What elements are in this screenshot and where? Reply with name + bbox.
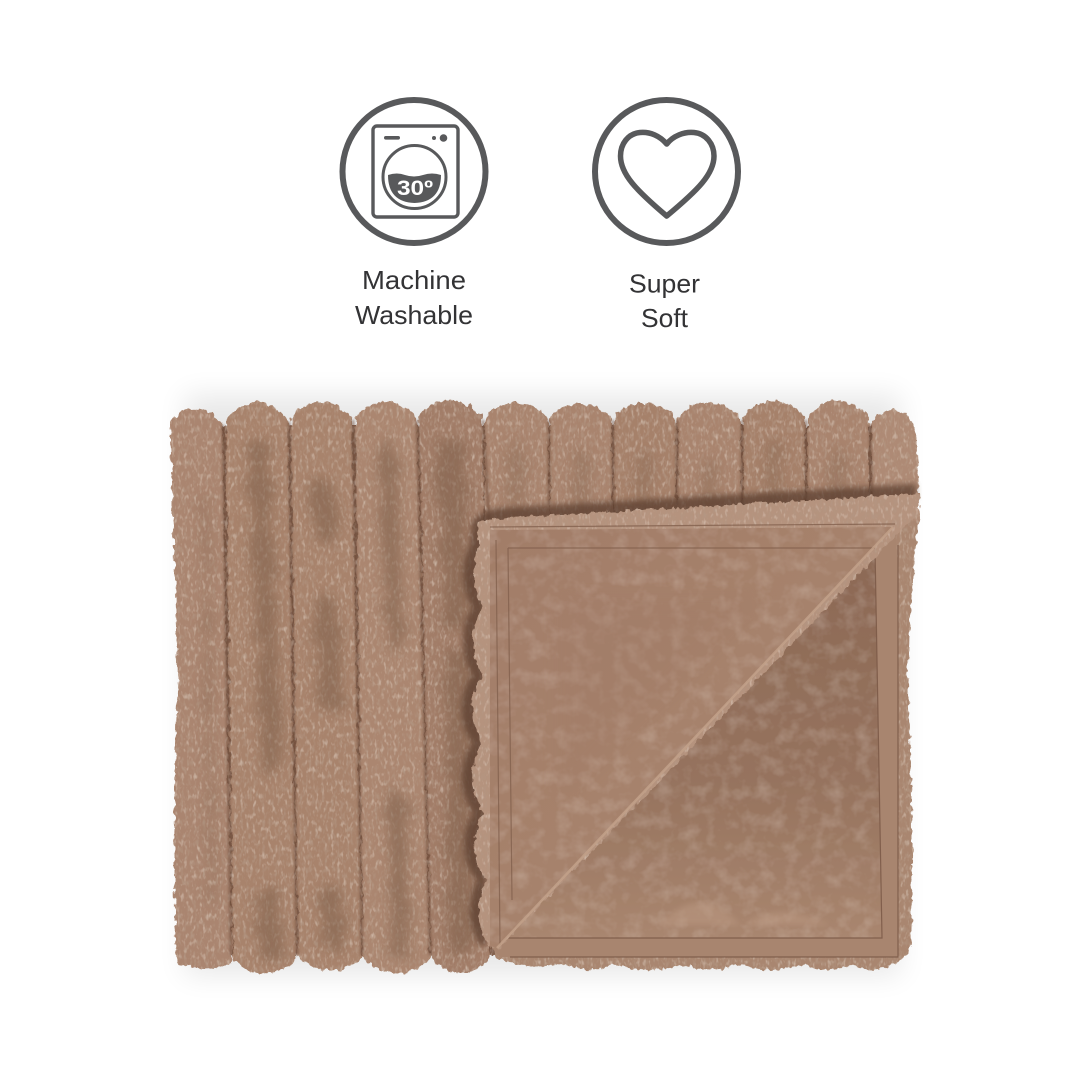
- label: machine washable: Machine: [362, 265, 466, 295]
- icon: washing machine in circle: [342, 100, 486, 243]
- shadow under flap edge: [462, 484, 916, 945]
- backing velvet with fur trim: [492, 520, 918, 970]
- label: machine washable: [355, 265, 473, 330]
- label: super soft: Super: [629, 268, 700, 298]
- label: machine washable: Washable: [355, 300, 473, 330]
- blanket shadow: [185, 395, 900, 975]
- folded flap with scalloped fur edge: [472, 494, 920, 950]
- feature: machine washable: [342, 100, 486, 330]
- feature: super soft: [595, 100, 738, 333]
- rib grooves: [223, 420, 872, 955]
- blanket photo illustration: [170, 395, 920, 975]
- label: super soft: Soft: [641, 303, 689, 333]
- label: super soft: [629, 268, 700, 333]
- fur ribs: [170, 400, 920, 973]
- rib centre shading: [205, 450, 838, 950]
- icon: washing machine in circle: 30º: [397, 177, 433, 200]
- icon: heart in circle: [595, 100, 738, 243]
